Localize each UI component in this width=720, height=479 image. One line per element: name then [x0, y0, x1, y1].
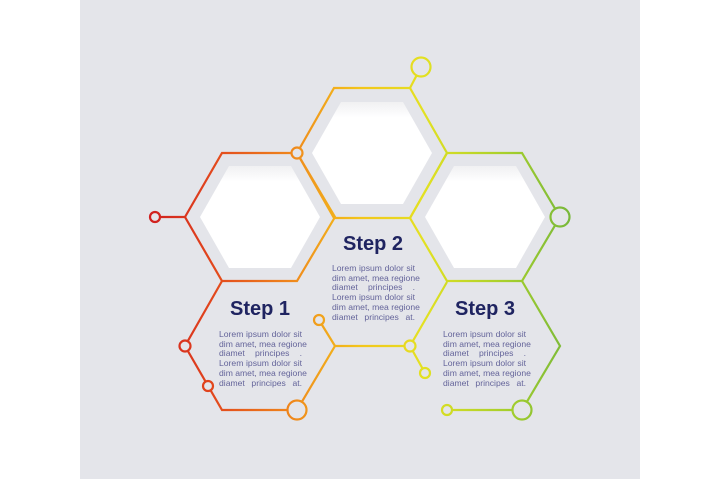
text: step 2: diamet principes at. — [332, 312, 415, 322]
text: step 1: Lorem ipsum dolor sit — [219, 329, 302, 339]
text: step 2: diamet principes . — [332, 282, 415, 292]
text: step 3 — [443, 329, 531, 388]
text: step 2: Lorem ipsum dolor sit — [332, 292, 415, 302]
text: step 2: dim amet, mea regione — [332, 273, 420, 283]
text: step 2: dim amet, mea regione — [332, 302, 420, 312]
text: step 1: dim amet, mea regione — [219, 368, 307, 378]
inner white hexagons — [200, 102, 545, 268]
text: step 2 — [332, 263, 420, 322]
text: step 1: dim amet, mea regione — [219, 339, 307, 349]
text: step 1: diamet principes at. — [219, 378, 302, 388]
heading: step 2: Step 2 — [343, 233, 403, 255]
text: step 1 — [219, 329, 307, 388]
text: step 3: diamet principes at. — [443, 378, 526, 388]
text: step 3: dim amet, mea regione — [443, 368, 531, 378]
text: step 1: diamet principes . — [219, 348, 302, 358]
heading: step 1: Step 1 — [230, 298, 290, 320]
heading: step 3: Step 3 — [455, 298, 515, 320]
text: step 3: Lorem ipsum dolor sit — [443, 358, 526, 368]
text: step 3: Lorem ipsum dolor sit — [443, 329, 526, 339]
text: step 2: Lorem ipsum dolor sit — [332, 263, 415, 273]
text: step 3: dim amet, mea regione — [443, 339, 531, 349]
text: step 3: diamet principes . — [443, 348, 526, 358]
outlines — [155, 67, 560, 410]
text: step 1: Lorem ipsum dolor sit — [219, 358, 302, 368]
connector circles — [150, 58, 570, 420]
